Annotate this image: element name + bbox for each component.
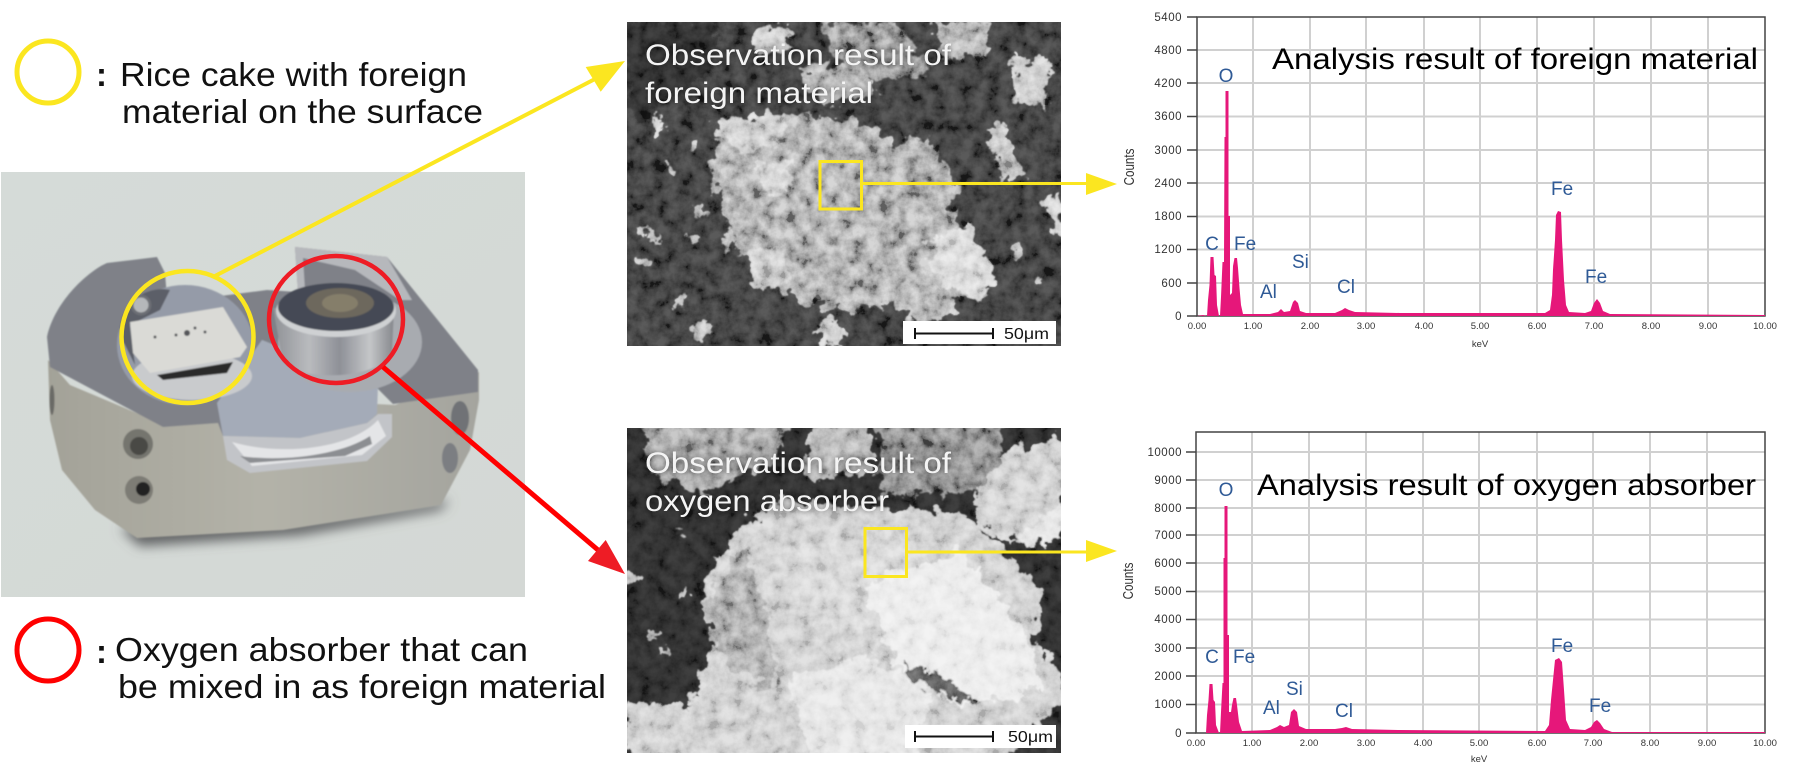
legend text: rice cake: Rice cake with foreign: [120, 56, 467, 93]
photo: machined holder with samples: [1, 172, 525, 597]
chart: spectrum of foreign material: 6.00: [1528, 321, 1546, 332]
chart: spectrum of oxygen absorber: 4.00: [1414, 738, 1432, 749]
element labels: Cl: [1335, 701, 1353, 722]
chart: spectrum of foreign material: 5400: [1154, 12, 1182, 24]
legend text: rice cake: :: [96, 56, 107, 93]
chart: spectrum of oxygen absorber: 0: [1175, 728, 1182, 740]
chart: spectrum of oxygen absorber: 10000: [1148, 447, 1182, 459]
element labels: Fe: [1234, 234, 1256, 255]
element labels: Fe: [1589, 696, 1611, 717]
scale bar: 50μm: [1004, 326, 1049, 343]
element labels: C: [1205, 647, 1219, 668]
chart: spectrum of foreign material: 7.00: [1585, 321, 1603, 332]
chart: spectrum of oxygen absorber: [1120, 432, 1777, 765]
element labels: Fe: [1551, 179, 1573, 200]
chart: spectrum of foreign material: 4.00: [1415, 321, 1433, 332]
chart: spectrum of oxygen absorber: 2000: [1154, 671, 1182, 683]
legend text: rice cake: material on the surface: [122, 93, 483, 130]
chart: spectrum of foreign material: 600: [1161, 278, 1182, 290]
element labels: Si: [1292, 252, 1309, 273]
element labels: Al: [1260, 282, 1277, 303]
photo marker: yellow circle on rice cake: [122, 271, 254, 403]
SEM label: foreign material: foreign material: [645, 77, 873, 110]
chart: spectrum of foreign material: 10.00: [1753, 321, 1777, 332]
chart: spectrum of oxygen absorber: keV: [1471, 754, 1488, 765]
chart: spectrum of oxygen absorber: 4000: [1154, 614, 1182, 626]
element labels: O: [1219, 480, 1233, 501]
chart: spectrum of foreign material: 5.00: [1471, 321, 1489, 332]
chart: spectrum of foreign material: 9.00: [1699, 321, 1717, 332]
scale bar: [905, 725, 1056, 748]
chart: spectrum of foreign material: 3000: [1154, 145, 1182, 157]
SEM label: foreign material: Observation result of: [645, 39, 952, 72]
chart: spectrum of foreign material: 2400: [1154, 178, 1182, 190]
chart: spectrum of oxygen absorber: 6.00: [1528, 738, 1546, 749]
chart: spectrum of foreign material: 1200: [1154, 244, 1182, 256]
element labels: Cl: [1337, 277, 1355, 298]
chart: spectrum of oxygen absorber: 2.00: [1300, 738, 1318, 749]
photo marker: red circle on oxygen absorber: [269, 256, 403, 383]
chart: spectrum of foreign material: 0: [1175, 311, 1182, 323]
chart: spectrum of oxygen absorber: 5.00: [1470, 738, 1488, 749]
chart: spectrum of oxygen absorber: 0.00: [1187, 738, 1205, 749]
element labels: C: [1205, 234, 1219, 255]
chart: spectrum of oxygen absorber: 3.00: [1357, 738, 1375, 749]
scale bar: [903, 321, 1056, 344]
chart: spectrum of oxygen absorber: 1000: [1154, 699, 1182, 711]
chart: spectrum of foreign material: 4800: [1154, 45, 1182, 57]
panel: SEM image of oxygen absorber: [627, 420, 1117, 762]
chart: spectrum of foreign material: 0.00: [1188, 321, 1206, 332]
chart: spectrum of oxygen absorber: 10.00: [1753, 738, 1777, 749]
chart: spectrum of foreign material: 8.00: [1642, 321, 1660, 332]
chart: spectrum of oxygen absorber: 7000: [1154, 530, 1182, 542]
element labels: Fe: [1585, 267, 1607, 288]
spectrum trace: [1196, 506, 1765, 733]
chart: spectrum of oxygen absorber: 9000: [1154, 475, 1182, 487]
chart: spectrum of foreign material: 3600: [1154, 111, 1182, 123]
chart title: Analysis result of foreign material: [1272, 43, 1758, 76]
selection box with connector and arrow: [865, 528, 1117, 576]
chart: spectrum of oxygen absorber: 6000: [1154, 558, 1182, 570]
chart: spectrum of foreign material: [1121, 12, 1777, 350]
element labels: [1205, 66, 1607, 303]
SEM label: oxygen absorber: [645, 447, 952, 518]
chart: spectrum of oxygen absorber: 3000: [1154, 643, 1182, 655]
SEM label: foreign material: [645, 39, 952, 110]
selection box with connector and arrow: [820, 162, 1117, 209]
chart: spectrum of foreign material: 1.00: [1244, 321, 1262, 332]
element labels: Si: [1286, 679, 1303, 700]
chart title: Analysis result of oxygen absorber: [1257, 469, 1756, 502]
spectrum trace: [1197, 91, 1765, 316]
chart: spectrum of oxygen absorber: 1.00: [1243, 738, 1261, 749]
element labels: Fe: [1551, 636, 1573, 657]
SEM label: oxygen absorber: Observation result of: [645, 447, 952, 480]
chart: spectrum of oxygen absorber: 8.00: [1641, 738, 1659, 749]
scale bar: 50μm: [1008, 729, 1053, 746]
chart: spectrum of foreign material: 2.00: [1301, 321, 1319, 332]
chart: spectrum of foreign material: 3.00: [1357, 321, 1375, 332]
element labels: O: [1219, 66, 1233, 87]
legend text: oxygen absorber: :: [96, 633, 107, 670]
chart: spectrum of foreign material: 1800: [1154, 211, 1182, 223]
element labels: [1205, 480, 1611, 722]
legend text: oxygen absorber: [96, 631, 606, 705]
element labels: Al: [1263, 698, 1280, 719]
legend text: oxygen absorber: be mixed in as foreign material: [118, 668, 606, 705]
legend text: oxygen absorber: Oxygen absorber that can: [115, 631, 528, 668]
chart: spectrum of oxygen absorber: Counts: [1120, 562, 1136, 599]
panel: SEM image of foreign material: [627, 22, 1117, 346]
chart: spectrum of oxygen absorber: 7.00: [1584, 738, 1602, 749]
chart: spectrum of oxygen absorber: 5000: [1154, 586, 1182, 598]
chart: spectrum of foreign material: 4200: [1154, 78, 1182, 90]
chart: spectrum of foreign material: Counts: [1121, 148, 1137, 185]
element labels: Fe: [1233, 647, 1255, 668]
arrow: red from absorber to observation: [383, 367, 625, 574]
chart: spectrum of foreign material: keV: [1472, 339, 1489, 350]
legend: yellow circle: [17, 41, 483, 130]
legend: red circle: [17, 619, 606, 705]
chart: spectrum of oxygen absorber: 8000: [1154, 503, 1182, 515]
chart: spectrum of oxygen absorber: 9.00: [1698, 738, 1716, 749]
SEM label: oxygen absorber: oxygen absorber: [645, 485, 889, 518]
legend text: rice cake: [96, 56, 483, 130]
arrow: yellow from rice cake to observation: [213, 61, 625, 277]
